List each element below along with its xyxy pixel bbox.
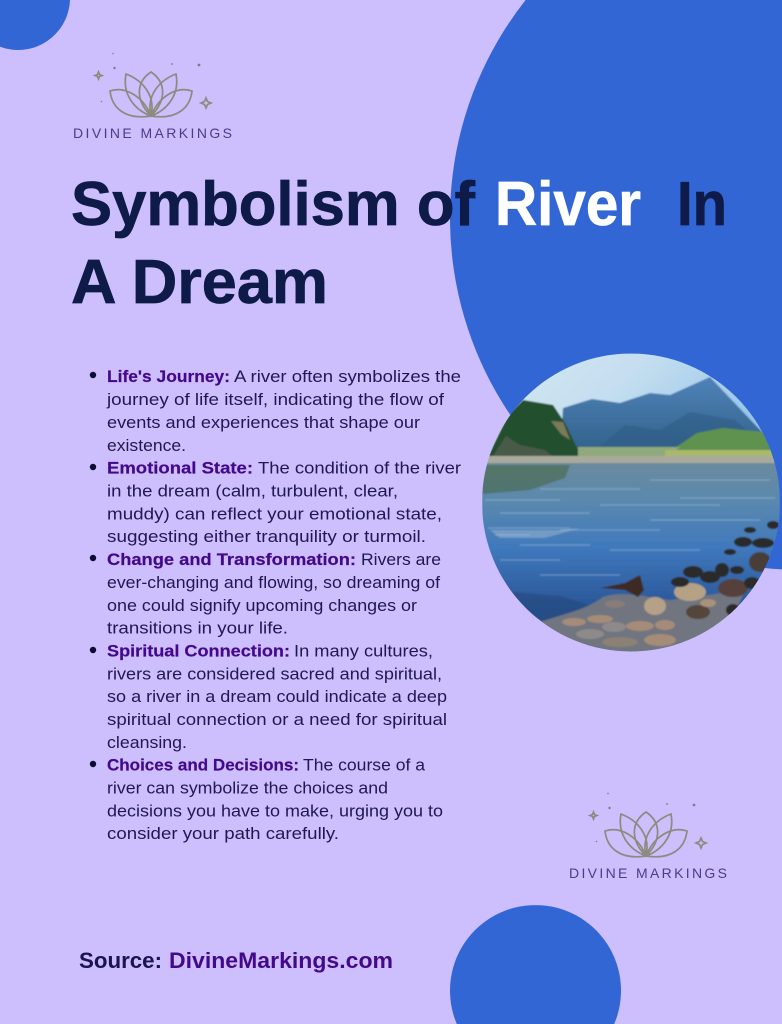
left hill: [488, 400, 582, 456]
bullet: spiritual connection: spiritual connection or a need for spiritual: [107, 710, 447, 729]
bullet: life's journey: events and experiences that shape our: [107, 413, 420, 432]
bullet: choices and decisions: consider your path carefully.: [107, 824, 339, 843]
source line: Source:: [79, 948, 162, 973]
decorative circle: bottom: [450, 905, 621, 1024]
icon: lotus: [95, 53, 211, 117]
photo: river landscape: [482, 353, 782, 660]
right hill: [672, 428, 775, 452]
bullet: spiritual connection: so a river in a dream could indicate a deep: [107, 687, 447, 706]
logo text: DIVINE MARKINGS: [73, 125, 232, 141]
logo: top: [73, 53, 232, 141]
bullet: emotional state: [90, 458, 461, 546]
source line: [79, 948, 393, 973]
bullet: change and transformation: ever-changing and flowing, so dreaming of: [107, 573, 440, 592]
bullet: emotional state: muddy) can reflect your emotional state,: [107, 504, 442, 524]
bullet: choices and decisions: river can symbolize the choices and: [107, 778, 388, 798]
bullet: spiritual connection: Spiritual Connection:: [107, 642, 290, 660]
bullet: life's journey: [90, 367, 461, 455]
title: River: [495, 170, 641, 239]
bullet: spiritual connection: cleansing.: [107, 733, 187, 752]
logo: bottom right: [569, 793, 727, 881]
bullet: choices and decisions: decisions you have to make, urging you to: [107, 802, 443, 820]
mountains: [561, 376, 762, 450]
title: [71, 170, 727, 317]
rocks: [600, 521, 779, 619]
bullet: emotional state: in the dream (calm, turbulent, clear,: [107, 482, 398, 500]
decorative circle: top left: [0, 0, 70, 50]
bullet: choices and decisions: The course of a: [303, 756, 426, 774]
bullet: change and transformation: one could signify upcoming changes or: [107, 596, 417, 615]
shoal: [540, 592, 744, 652]
bullet list: [90, 367, 461, 843]
bullet: emotional state: suggesting either tranquility or turmoil.: [107, 527, 426, 546]
bullet: choices and decisions: [90, 756, 443, 843]
bullet: life's journey: journey of life itself, indicating the flow of: [106, 390, 444, 409]
decorative circle: large blue: [450, 0, 782, 569]
bullet: change and transformation: Rivers are: [361, 550, 441, 569]
logo text: DIVINE MARKINGS: [569, 865, 727, 881]
bullet: life's journey: Life's Journey:: [107, 367, 230, 386]
bullet: change and transformation: [90, 550, 441, 638]
shore: [482, 456, 780, 463]
bullet: spiritual connection: In many cultures,: [294, 642, 433, 660]
source line: DivineMarkings.com: [169, 948, 393, 973]
bullet: life's journey: existence.: [107, 436, 186, 455]
water: [482, 462, 780, 622]
title: In: [677, 170, 727, 239]
bullet: change and transformation: Change and Transformation:: [107, 550, 356, 569]
title: A Dream: [71, 248, 328, 317]
bullet: life's journey: A river often symbolizes the: [234, 367, 461, 386]
icon: lotus: [590, 793, 706, 857]
bullet: spiritual connection: rivers are considered sacred and spiritual,: [107, 664, 442, 684]
title: Symbolism of: [71, 170, 475, 239]
bullet: choices and decisions: Choices and Decisions:: [107, 756, 299, 774]
bullet: emotional state: The condition of the river: [258, 458, 461, 478]
bullet: change and transformation: transitions in your life.: [107, 618, 288, 638]
bullet: spiritual connection: [90, 642, 447, 752]
bullet: emotional state: Emotional State:: [107, 458, 253, 478]
